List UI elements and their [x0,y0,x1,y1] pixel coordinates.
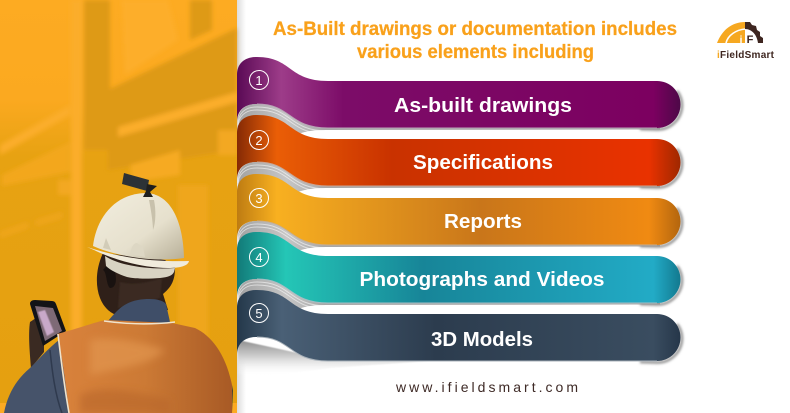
ribbon 3: Reports: 3 [255,191,263,206]
ribbon 5: 3D Models: 5 [255,306,263,321]
sleeve and jacket [4,335,72,413]
shirt collar [108,299,170,326]
ribbon 4: Photographs and Videos [237,232,682,315]
title: various elements including [357,42,594,63]
ribbon 1: As-built drawings [237,57,682,140]
ribbon 3: Reports [237,174,682,257]
phone and hand [29,300,66,368]
ribbon 5: 3D Models [237,290,682,363]
ribbon 1: As-built drawings: 1 [255,73,263,88]
hi-vis vest [57,320,232,413]
hard hat [87,193,189,268]
helmet camera [122,173,157,197]
logo: iFieldSmart: i [740,35,743,46]
ribbon 2: Specifications: Specifications [413,152,553,174]
ribbon 4: Photographs and Videos: 4 [255,250,263,265]
neck and head [97,253,175,314]
title [273,19,677,63]
website url: www.ifieldsmart.com [395,379,578,395]
logo: iFieldSmart: F [747,34,754,46]
ribbon 4: Photographs and Videos: Photographs and Videos [360,269,604,291]
ribbon 3: Reports: Reports [444,211,522,233]
page edge shadow [237,0,246,413]
ribbon 2: Specifications [237,115,682,198]
ribbon 1: As-built drawings: As-built drawings [394,95,572,117]
ribbon 5: 3D Models: 3D Models [431,329,533,351]
bottom fold under last ribbon [238,340,430,378]
hard hat band [105,256,175,279]
ribbon 2: Specifications: 2 [255,133,263,148]
logo: iFieldSmart [717,22,775,61]
title: As-Built drawings or documentation includes [273,19,677,40]
logo: iFieldSmart: iFieldSmart [717,50,775,61]
photo background panel [0,0,237,413]
worker photo illustration [4,173,233,413]
